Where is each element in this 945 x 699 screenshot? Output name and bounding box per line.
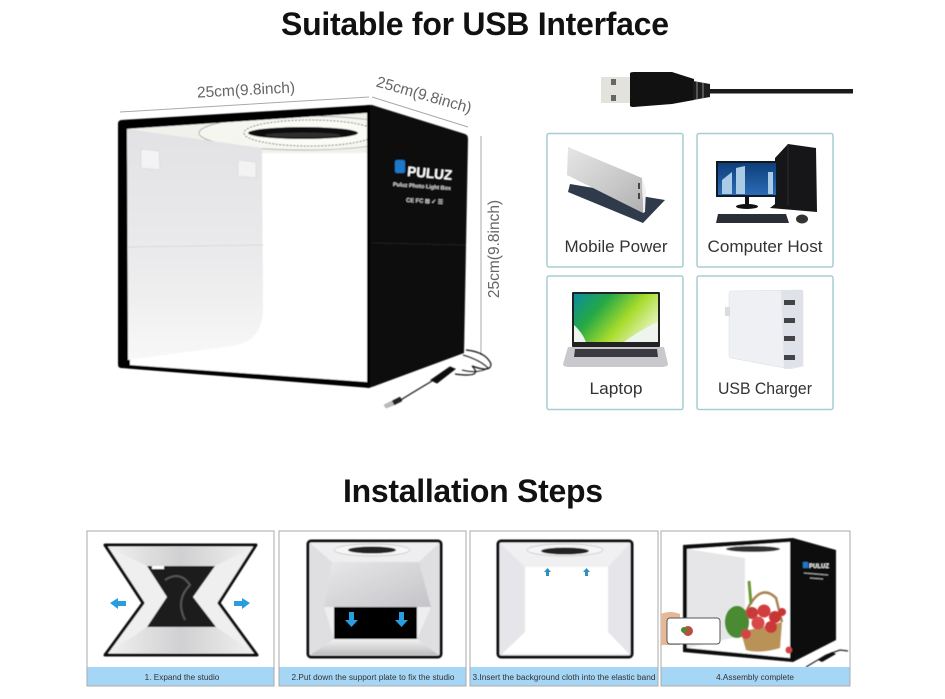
card: Laptop: [547, 276, 683, 410]
illustration: assembled studio: [683, 538, 848, 667]
label: Laptop: Laptop: [590, 379, 642, 398]
dimension: width: 25cm(9.8inch): [197, 79, 296, 102]
box side panel: [367, 105, 468, 388]
icon: desktop computer: [716, 144, 817, 224]
infographic canvas: [86, 12, 853, 686]
illustration: background cloth: [498, 541, 632, 657]
dimension: height: 25cm(9.8inch): [486, 200, 503, 298]
arrow: right: [234, 598, 250, 609]
label: Computer Host: Computer Host: [708, 237, 823, 256]
left wall: [127, 129, 263, 360]
photo light box: [118, 105, 491, 408]
velcro patches: [141, 149, 256, 178]
caption: step 1: 1. Expand the studio: [145, 673, 220, 682]
PULUZ logo: [393, 160, 453, 206]
illustration: expanded studio: [105, 545, 257, 655]
icon: laptop: [563, 292, 668, 367]
arrow: left: [110, 598, 126, 609]
USB plug and cable: [601, 72, 853, 107]
dimension: width: [120, 79, 369, 112]
back wall and floor: [127, 113, 367, 382]
side fold: [372, 243, 466, 245]
USB cable with switch: [384, 350, 491, 408]
step 4 panel: [661, 531, 850, 686]
step 3 panel: [470, 531, 658, 686]
card: Computer Host: [697, 134, 833, 267]
PULUZ logo: Puluz Photo Light Box: [393, 182, 452, 192]
title: Suitable for USB Interface: Suitable for USB Interface: [281, 6, 669, 42]
box front frame: [118, 105, 370, 388]
illustration: phone in hand: [661, 612, 720, 645]
caption: step 3: 3.Insert the background cloth into the elastic band: [472, 673, 656, 682]
ceiling: [127, 113, 367, 153]
illustration: assembled studio: PULUZ: [809, 564, 829, 570]
caption bar: [280, 667, 466, 686]
caption bar: [88, 667, 274, 686]
label: USB Charger: USB Charger: [718, 379, 812, 398]
card: Mobile Power: [547, 134, 683, 267]
dimension: depth: 25cm(9.8inch): [374, 74, 473, 117]
icon: USB charger: [725, 290, 803, 369]
caption: step 4: 4.Assembly complete: [716, 673, 794, 682]
ring light: [198, 115, 368, 151]
heading: Installation Steps: Installation Steps: [343, 473, 603, 509]
wall fold: [128, 245, 263, 247]
arrows: down: [345, 612, 408, 627]
caption bar: [470, 667, 658, 686]
icon: power bank: [567, 147, 665, 223]
card: USB Charger: [697, 276, 833, 410]
step 1 panel: [87, 531, 274, 686]
label: Mobile Power: Mobile Power: [564, 237, 668, 256]
arrows: up: [544, 568, 590, 576]
illustration: support plate: [308, 541, 441, 657]
PULUZ logo: CE FC ⊠ ✓ ☰: [406, 197, 443, 206]
PULUZ logo: PULUZ: [407, 163, 453, 183]
illustration: fruit basket: [725, 581, 792, 654]
caption: step 2: 2.Put down the support plate to fix the studio: [292, 673, 455, 682]
step 2 panel: [279, 531, 466, 686]
caption bar: [662, 667, 850, 686]
